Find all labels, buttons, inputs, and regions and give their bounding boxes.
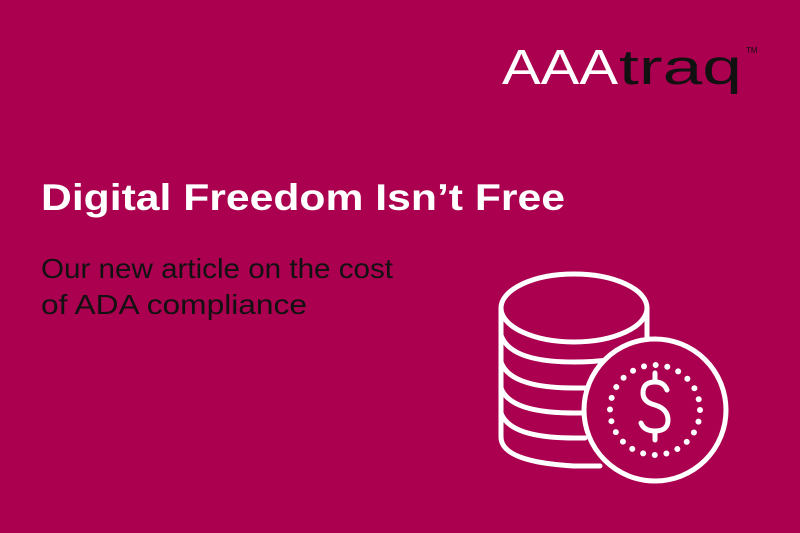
logo: AAAtraq: traq	[619, 41, 742, 95]
title: Digital Freedom Isn’t Free	[41, 177, 565, 218]
subtitle: Our new article on the cost	[41, 253, 393, 284]
icon: coin stack with dollar coin	[501, 274, 726, 481]
subtitle: of ADA compliance	[41, 289, 307, 320]
subtitle	[41, 253, 393, 320]
logo: AAAtraq: AAA	[502, 41, 618, 95]
logo: AAAtraq	[502, 41, 758, 95]
logo: AAAtraq: TM	[746, 46, 758, 55]
